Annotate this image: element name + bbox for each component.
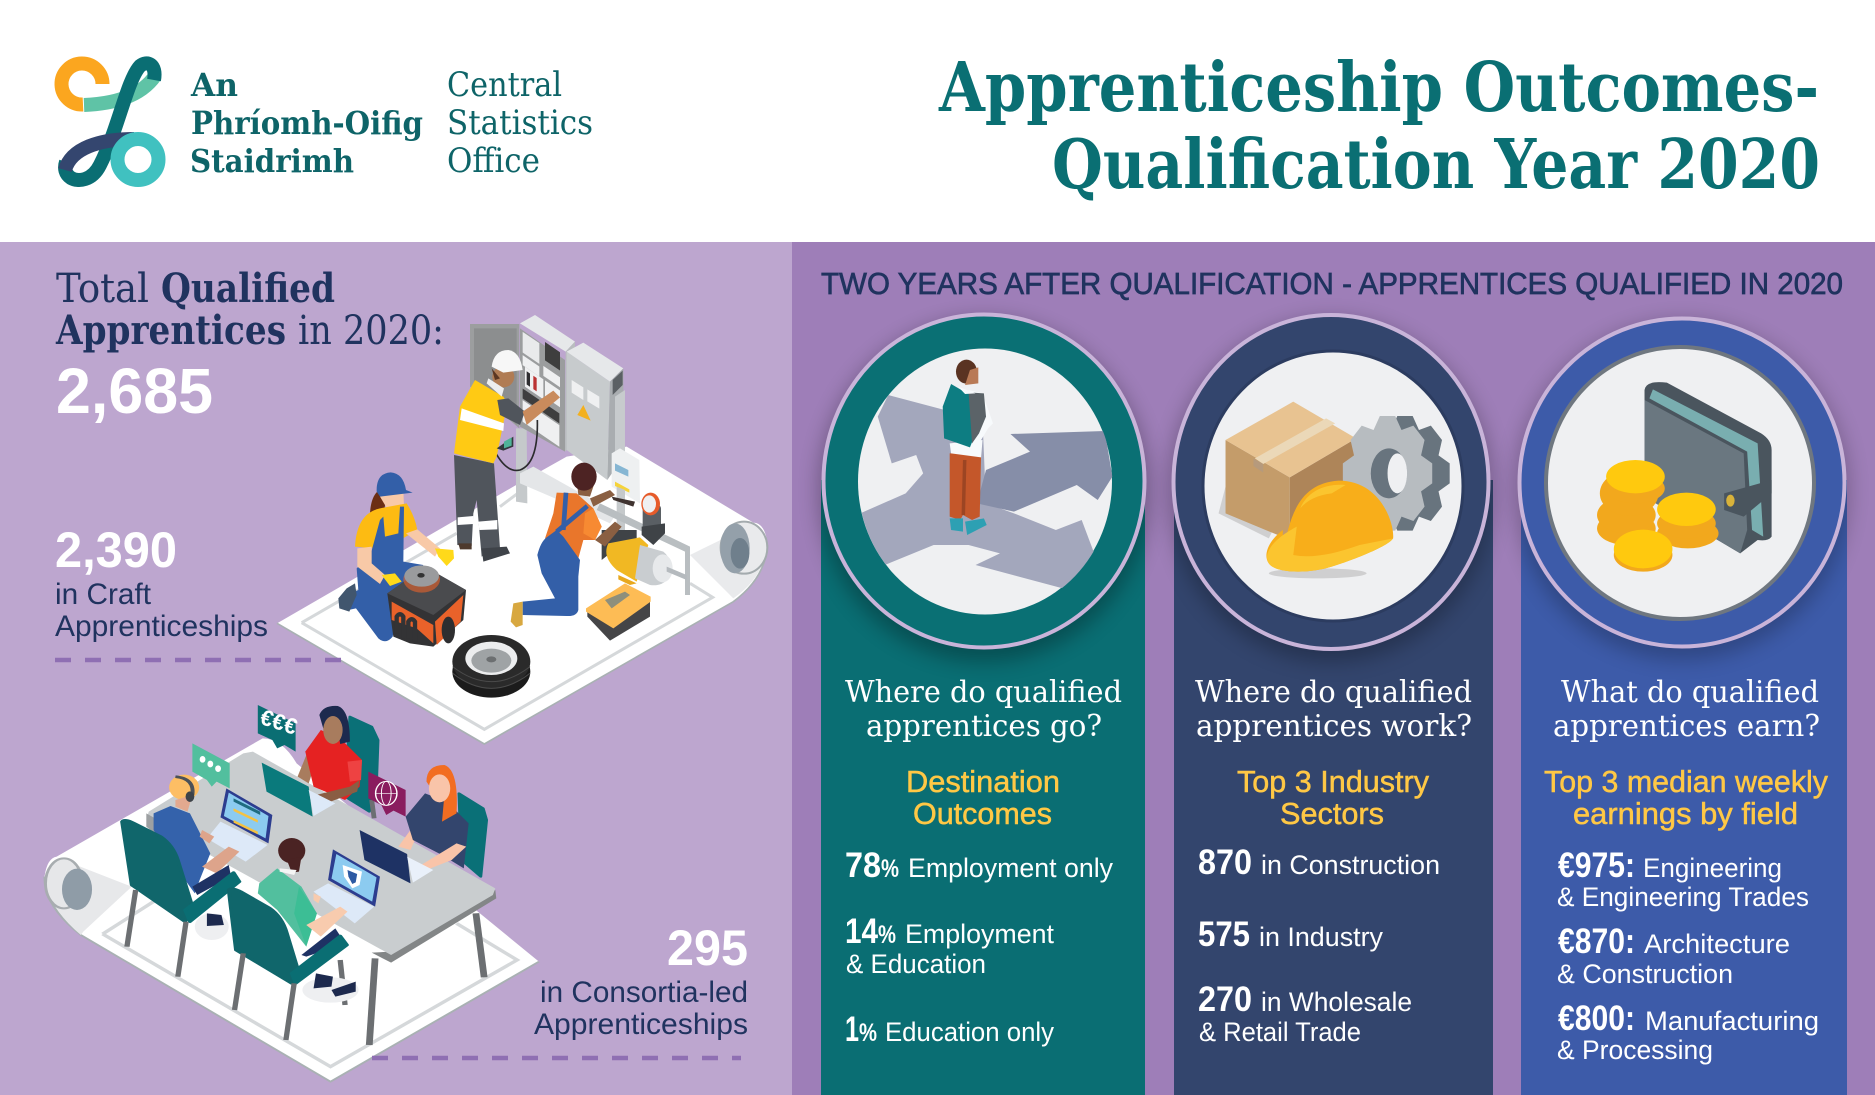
- door: [470, 324, 519, 428]
- list: destination percentages: %: [859, 1019, 877, 1047]
- list: destination percentages: %: [881, 855, 899, 883]
- tyre: [452, 646, 530, 698]
- list: destination percentages: Employment: [905, 919, 1054, 949]
- subheading: destination outcomes: Destination: [906, 764, 1060, 799]
- subheading: top 3 industry sectors: Top 3 Industry: [1237, 764, 1429, 799]
- figure: craft apprenticeships: in Craft: [55, 578, 152, 611]
- table: [372, 890, 496, 963]
- list: destination percentages: Employment only: [908, 853, 1113, 883]
- heading: total qualified apprentices: Qualified: [161, 265, 335, 312]
- list: median weekly earnings by field: €975:: [1558, 846, 1635, 885]
- icon: box, gear and hard hat: [1219, 402, 1450, 578]
- logo text: Irish name: Phríomh-Oifig: [191, 104, 423, 142]
- figure: consortia-led apprenticeships: [534, 920, 748, 1041]
- column 2: industry sectors: [1168, 315, 1494, 1095]
- cabinet 1: [520, 328, 565, 452]
- column 1: destination outcomes: [818, 314, 1150, 1095]
- question: where do apprentices work: Where do qualified: [1195, 675, 1472, 710]
- list: median weekly earnings by field: Architecture: [1644, 929, 1790, 959]
- laptop teal: [262, 763, 313, 817]
- engine: [387, 567, 466, 647]
- female worker: [370, 492, 387, 528]
- heading: total qualified apprentices: in 2020:: [298, 308, 444, 354]
- list: industry sector counts: [1198, 843, 1440, 1047]
- list: industry sector counts: 270: [1198, 980, 1252, 1019]
- question: where do apprentices go: [845, 675, 1122, 744]
- figure: consortia-led apprenticeships: Apprenticeships: [534, 1008, 748, 1041]
- speech bubble: globe: [368, 772, 406, 817]
- list: median weekly earnings by field: Engineering: [1643, 853, 1782, 883]
- list: destination percentages: & Education: [846, 949, 986, 979]
- panel: right two years after qualification: [792, 242, 1875, 1095]
- chair near left: [122, 820, 192, 922]
- subheading: top 3 industry sectors: Sectors: [1280, 796, 1384, 831]
- list: median weekly earnings by field: & Construction: [1557, 959, 1733, 989]
- total figure: 2,685: [56, 355, 213, 427]
- logo text: Irish name: [190, 66, 423, 180]
- laptop navy: [360, 830, 410, 883]
- laptop with shield: [314, 883, 374, 923]
- green man: [258, 868, 317, 947]
- illustration: craft apprentices on a sheet: [277, 315, 768, 744]
- list: destination percentages: 14: [845, 912, 878, 951]
- question: where do apprentices go: Where do qualified: [845, 675, 1122, 710]
- chairs far side: [345, 717, 378, 812]
- question: what do apprentices earn: What do qualified: [1561, 675, 1819, 710]
- pump unit: [612, 448, 640, 503]
- illustration: consortia-led apprentices at a table: €€€: [257, 704, 300, 740]
- question: what do apprentices earn: apprentices earn?: [1553, 709, 1820, 744]
- logo text: English name: [447, 65, 593, 181]
- list: destination percentages: 78: [845, 846, 881, 885]
- list: industry sector counts: in Wholesale: [1261, 987, 1412, 1017]
- figure: craft apprenticeships: 2,390: [55, 522, 177, 578]
- sheet: [277, 447, 768, 744]
- speech bubble: dots: [192, 743, 230, 788]
- blue man: [154, 806, 210, 893]
- logo text: English name: Central: [447, 65, 562, 105]
- column 3: median weekly earnings: [1514, 318, 1850, 1095]
- toolbox: [587, 600, 650, 641]
- question: where do apprentices work: [1195, 675, 1472, 744]
- question: where do apprentices go: apprentices go?: [866, 709, 1102, 744]
- figure: craft apprenticeships: Apprenticeships: [55, 610, 268, 643]
- title: [938, 48, 1820, 205]
- list: median weekly earnings by field: €870:: [1558, 922, 1635, 961]
- question: what do apprentices earn: [1553, 675, 1820, 744]
- list: destination percentages: %: [878, 921, 896, 949]
- logo text: Irish name: Staidrimh: [190, 142, 354, 180]
- cabinet 2: [567, 352, 610, 480]
- heading: total qualified apprentices: Apprentices: [55, 307, 286, 354]
- list: median weekly earnings by field: [1557, 846, 1819, 1065]
- figure: consortia-led apprenticeships: 295: [667, 920, 748, 976]
- list: median weekly earnings by field: €800:: [1558, 999, 1635, 1038]
- red woman: [298, 743, 321, 783]
- logo text: English name: Statistics: [447, 103, 593, 143]
- heading: two years after qualification: TWO YEARS AFTER QUALIFICATION - APPRENTICES QUALIFIED IN 2020: [821, 266, 1843, 301]
- figure: consortia-led apprenticeships: in Consortia-led: [540, 976, 748, 1009]
- list: industry sector counts: in Construction: [1261, 850, 1440, 880]
- electrician: [454, 455, 500, 557]
- illustration: consortia-led apprentices at a table: [45, 704, 539, 1082]
- list: destination percentages: [845, 846, 1113, 1049]
- logo icon: [62, 63, 158, 180]
- subheading: destination outcomes: Outcomes: [913, 796, 1052, 831]
- subheading: top 3 median weekly earnings: Top 3 median weekly: [1544, 764, 1828, 799]
- subheading: top 3 median weekly earnings: earnings by field: [1573, 796, 1798, 831]
- list: industry sector counts: in Industry: [1259, 922, 1383, 952]
- figure: craft apprenticeships: [55, 522, 268, 643]
- subheading: top 3 industry sectors: [1237, 764, 1429, 831]
- stand: [516, 428, 527, 503]
- list: industry sector counts: 870: [1198, 843, 1252, 882]
- icon: wallet and coins: [1597, 382, 1772, 572]
- panel: left total apprentices: [0, 242, 792, 1095]
- list: destination percentages: Education only: [885, 1017, 1054, 1047]
- laptop with code: [207, 822, 267, 862]
- list: destination percentages: 1: [845, 1010, 859, 1049]
- list: median weekly earnings by field: & Processing: [1557, 1035, 1713, 1065]
- heading: total qualified apprentices: [55, 265, 444, 354]
- icon: person at crossroads: [860, 360, 1112, 588]
- navy woman: [398, 827, 418, 850]
- sheet: [45, 738, 539, 1082]
- question: where do apprentices work: apprentices work?: [1196, 709, 1472, 744]
- male kneeling worker: [545, 493, 602, 558]
- logo text: Irish name: An: [190, 66, 238, 104]
- subheading: top 3 median weekly earnings: [1544, 764, 1828, 831]
- list: industry sector counts: 575: [1198, 915, 1250, 954]
- list: median weekly earnings by field: Manufacturing: [1645, 1006, 1819, 1036]
- subheading: destination outcomes: [906, 764, 1060, 831]
- logo text: English name: Office: [447, 141, 540, 181]
- heading: total qualified apprentices: Total: [56, 266, 149, 312]
- speech bubble: euro: [258, 705, 296, 752]
- list: median weekly earnings by field: & Engineering Trades: [1557, 882, 1809, 912]
- list: industry sector counts: & Retail Trade: [1199, 1017, 1361, 1047]
- chair near right: [229, 889, 299, 983]
